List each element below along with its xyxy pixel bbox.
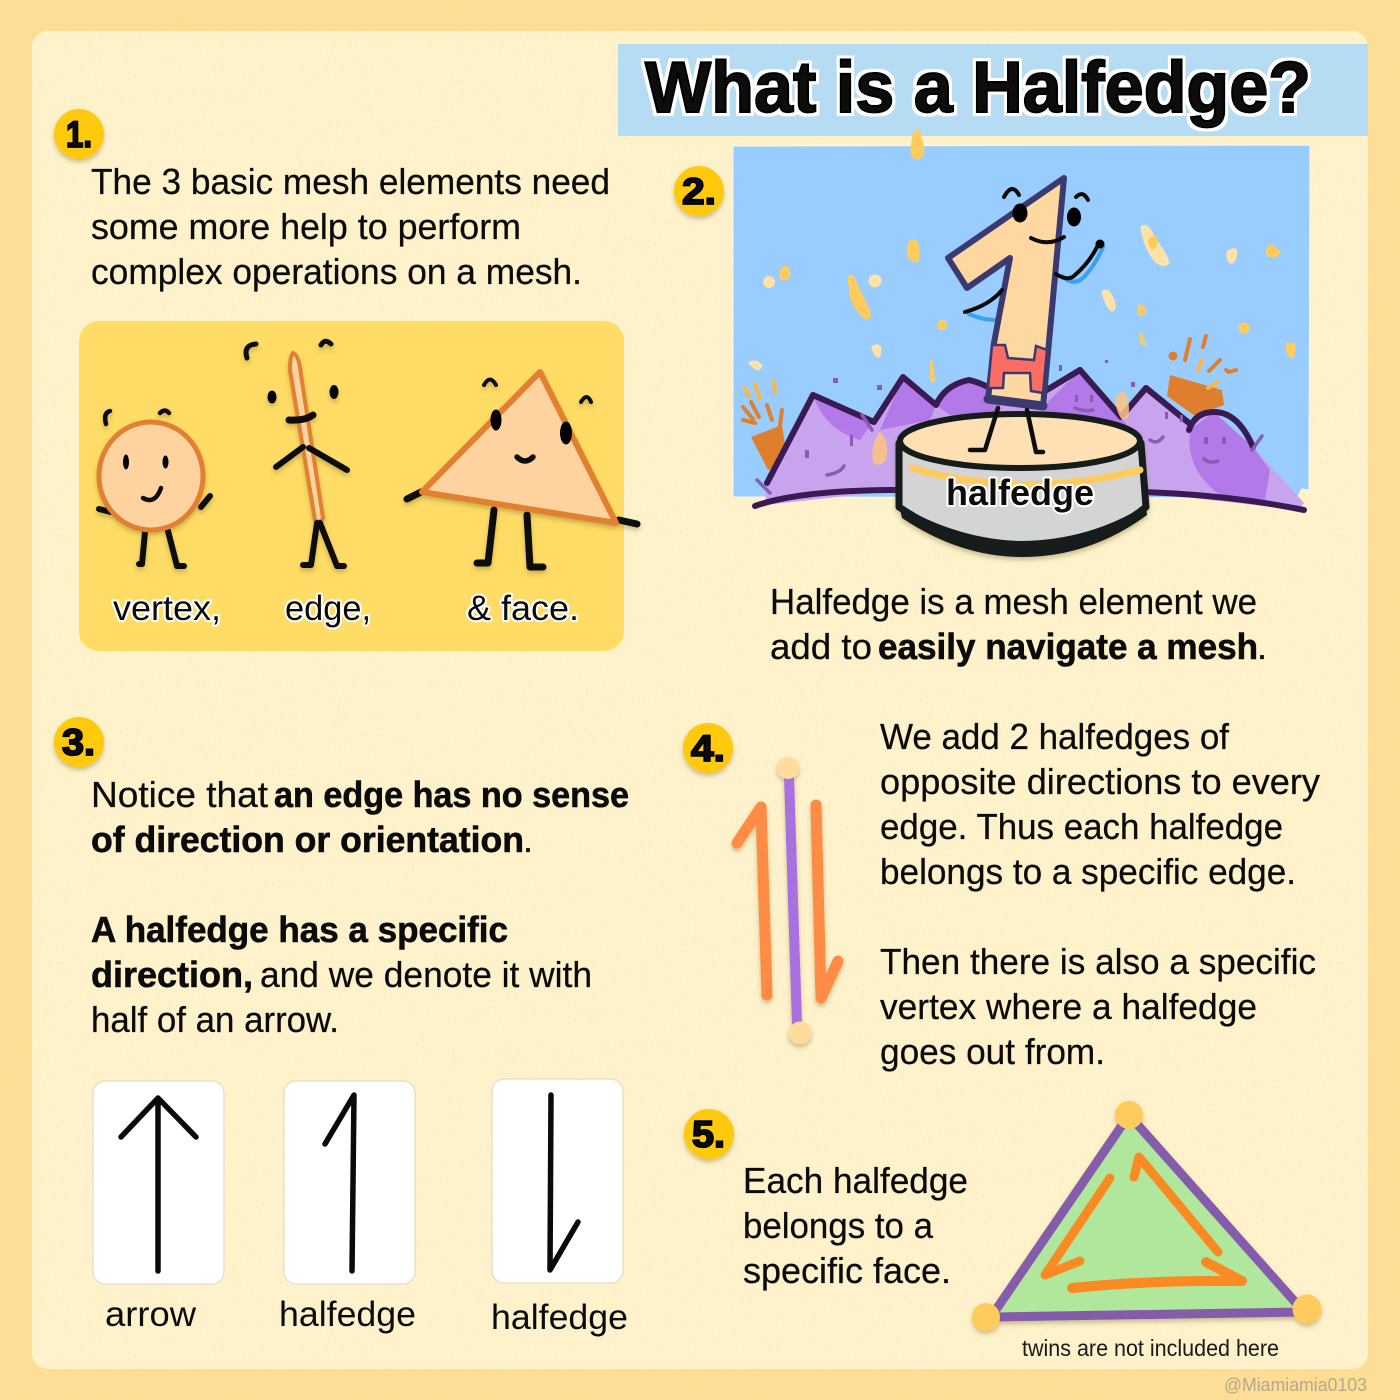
step 2 text: easily navigate a mesh [878,626,1258,667]
sky panel [733,145,1310,498]
labels: & face. [467,589,579,628]
step 5 text: specific face. [743,1250,951,1291]
step 2 badge: 2. [682,171,716,212]
face character [407,372,637,567]
step 3 text: half of an arrow. [91,999,339,1040]
illustration: halfedge on a podium [733,131,1310,557]
card labels: halfedge [279,1295,416,1334]
credit: @Miamiamia0103 [1224,1375,1367,1395]
card: halfedge up [284,1081,415,1284]
letter H belt [988,345,1047,393]
step 2 badge [674,166,724,216]
step 5 badge [684,1109,734,1159]
step 2 text [770,581,1267,667]
number one character [948,178,1104,407]
step 4 text: vertex where a halfedge [880,986,1257,1027]
card labels: arrow [105,1295,197,1334]
step 1 badge: 1. [66,114,92,155]
step 3 text: and we denote it with [260,954,592,995]
vertex character [99,410,210,566]
step 4 text: goes out from. [880,1031,1105,1072]
step 4 text: opposite directions to every [880,761,1320,802]
step 4 text: We add 2 halfedges of [880,716,1230,757]
half arrow up icon [325,1095,354,1271]
step 2 text: add to [770,626,872,667]
step 5 badge: 5. [692,1114,725,1155]
step 1 text [91,161,610,292]
step 3 text: an edge has no sense [274,774,629,815]
card: halfedge down [492,1079,623,1283]
step 1 text: some more help to perform [91,206,521,247]
diagram caption: twins are not included here [1022,1335,1279,1361]
title banner [618,44,1368,136]
step 2 text: Halfedge is a mesh element we [770,581,1257,622]
step 3 text: direction, [91,954,253,995]
step 5 text: belongs to a [743,1205,934,1246]
translucent confetti over hills [872,392,1129,465]
step 1 text: complex operations on a mesh. [91,251,582,292]
step 3 badge: 3. [62,722,95,763]
step 4 text: belongs to a specific edge. [880,851,1296,892]
panel: mesh elements [79,321,637,651]
confetti [750,131,1294,381]
card labels [105,1295,628,1337]
card labels: halfedge [491,1298,628,1337]
step 4 text [880,716,1320,1072]
step 5 text [743,1160,968,1291]
title: What is a Halfedge? [645,48,1311,128]
step 4 badge: 4. [691,728,725,769]
step 3 text: of direction or orientation [91,819,524,860]
step 1 text: The 3 basic mesh elements need [91,161,610,202]
step 1 badge [54,109,104,159]
purple hills [755,360,1304,510]
step 3 badge [54,717,104,767]
podium [899,408,1147,557]
step 5 text: Each halfedge [743,1160,968,1201]
edge character [246,341,347,566]
step 4 text: Then there is also a specific [880,941,1316,982]
diagram: triangle face with halfedges [974,1102,1320,1330]
card: arrow [93,1081,224,1284]
diagram: edge with two halfedges [737,757,838,1044]
step 3 text [91,774,629,1040]
labels: edge, [285,589,371,628]
step 4 badge [683,723,733,773]
left orange burst [743,336,1236,470]
podium label: halfedge [946,472,1094,513]
half arrow down icon [550,1095,578,1270]
step 3 text: A halfedge has a specific [91,909,508,950]
labels [113,589,579,628]
step 3 text: . [523,819,533,860]
step 2 text: . [1257,626,1267,667]
arrow icon [121,1098,196,1271]
step 3 text: Notice that [91,774,268,815]
right orange burst [1167,375,1224,416]
step 4 text: edge. Thus each halfedge [880,806,1283,847]
labels: vertex, [113,589,221,628]
